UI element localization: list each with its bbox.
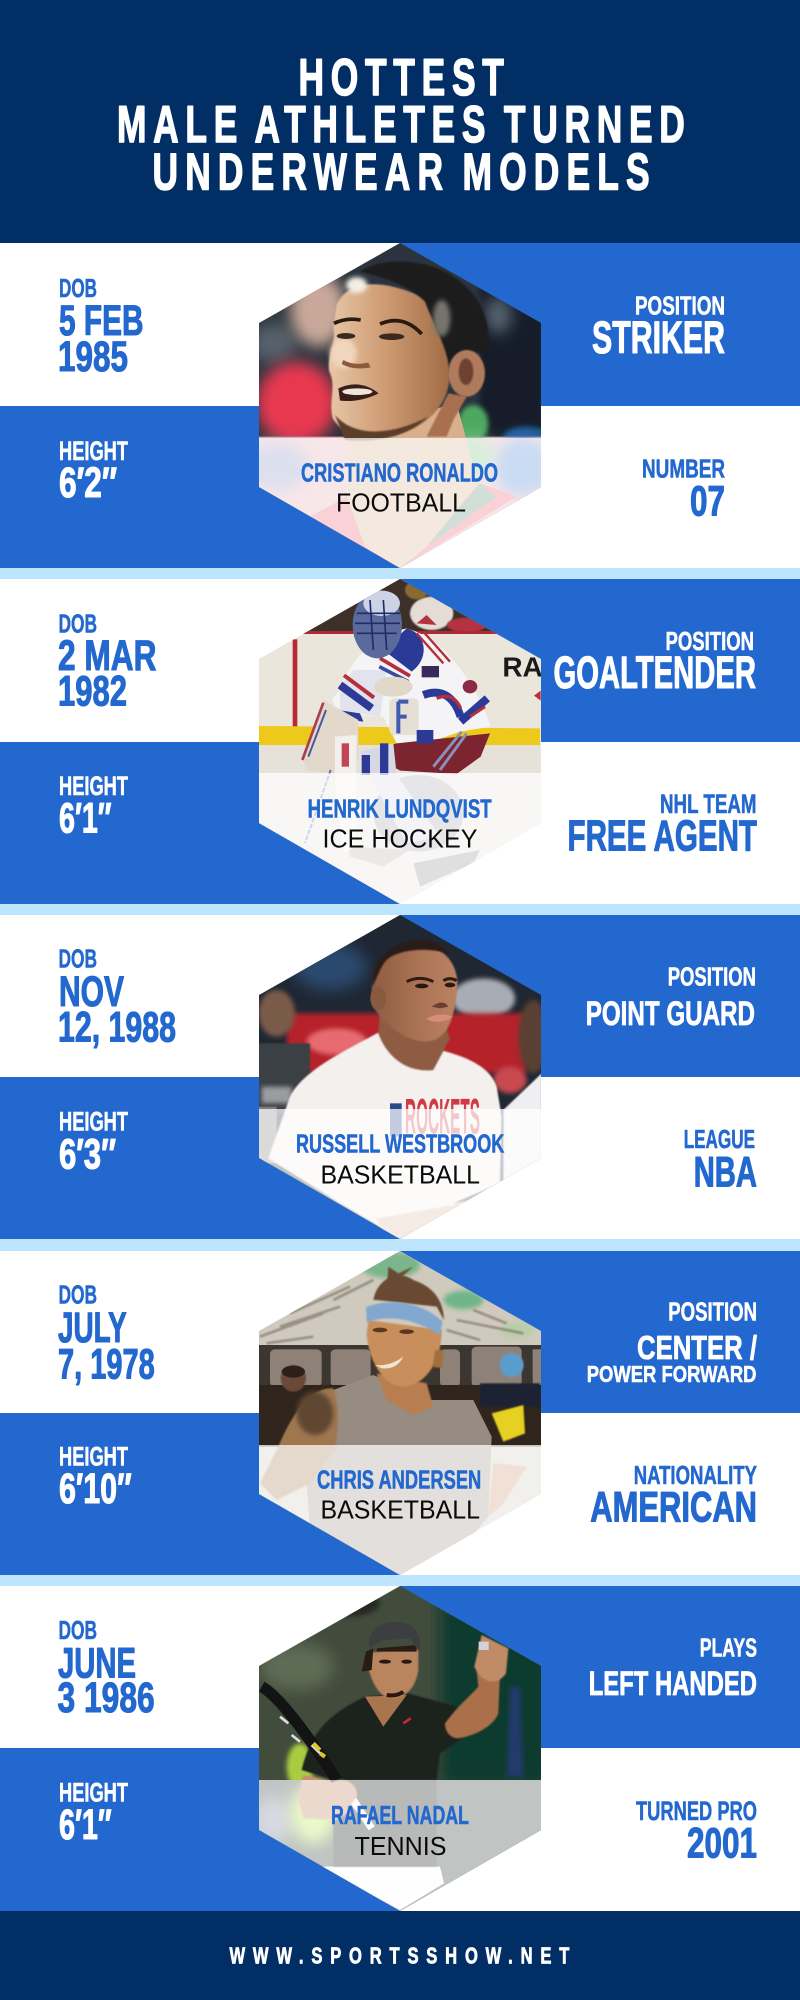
left stats: DOB	[58, 608, 97, 638]
title	[117, 49, 685, 201]
name and sport: CRISTIANO RONALDO	[301, 458, 498, 488]
left stats	[58, 608, 156, 842]
right stats: POSITION	[668, 1297, 757, 1327]
photo: Russell Westbrook: ROCKETS	[405, 1088, 480, 1144]
photo: Chris Andersen	[259, 1251, 541, 1575]
name and sport: TENNIS	[354, 1833, 446, 1861]
left stats: HEIGHT	[59, 771, 128, 801]
left stats: DOB	[59, 273, 97, 303]
left stats: 1982	[58, 668, 127, 716]
panel: Chris Andersen	[0, 1250, 800, 1583]
left stats: 1985	[58, 333, 128, 381]
name and sport: HENRIK LUNDQVIST	[308, 794, 492, 824]
right stats	[586, 962, 757, 1197]
left stats: 6′3″	[59, 1130, 116, 1178]
caption overlay	[259, 438, 541, 568]
left stats: 6′1″	[59, 794, 112, 842]
name and sport: ICE HOCKEY	[322, 825, 478, 853]
panel: Rafael Nadal	[0, 1580, 800, 1913]
right stats: NHL TEAM	[660, 789, 756, 819]
left stats: DOB	[58, 944, 97, 974]
name and sport	[308, 794, 492, 853]
left stats: 3 1986	[58, 1674, 155, 1722]
photo: Russell Westbrook	[259, 915, 541, 1239]
right stats: POWER FORWARD	[587, 1361, 756, 1387]
right stats: POSITION	[668, 962, 756, 992]
left stats: DOB	[58, 1615, 97, 1645]
panel: Russell Westbrook	[0, 910, 800, 1243]
right stats	[589, 1633, 757, 1868]
photo: Cristiano Ronaldo	[259, 243, 541, 568]
left stats: JUNE	[58, 1639, 136, 1687]
right stats: 07	[690, 478, 725, 526]
name and sport	[296, 1129, 504, 1189]
left stats: HEIGHT	[59, 1106, 128, 1136]
left stats: JULY	[58, 1304, 127, 1352]
title: MALE ATHLETES TURNED	[117, 96, 685, 154]
left stats: HEIGHT	[59, 436, 128, 466]
right stats: STRIKER	[592, 312, 725, 363]
right stats: NUMBER	[642, 454, 725, 484]
right stats: POSITION	[666, 626, 754, 656]
right stats: 2001	[687, 1820, 757, 1868]
left stats: DOB	[58, 1280, 97, 1310]
footer	[0, 1911, 800, 2000]
title: UNDERWEAR MODELS	[152, 144, 650, 201]
left stats: 5 FEB	[59, 297, 144, 345]
caption overlay	[259, 1780, 541, 1911]
left stats: 6′10″	[59, 1465, 132, 1513]
left stats: 2 MAR	[58, 632, 156, 680]
right stats: LEAGUE	[684, 1124, 755, 1154]
title: HOTTEST	[298, 49, 504, 107]
photo: Henrik Lundqvist	[259, 579, 541, 904]
left stats: NOV	[59, 968, 124, 1016]
left stats: 7, 1978	[58, 1340, 155, 1388]
right stats: NBA	[694, 1149, 757, 1197]
left stats: HEIGHT	[59, 1778, 128, 1808]
name and sport: RUSSELL WESTBROOK	[296, 1129, 504, 1159]
caption overlay	[259, 1445, 541, 1575]
name and sport: FOOTBALL	[336, 490, 466, 518]
right stats	[554, 626, 757, 860]
name and sport: BASKETBALL	[320, 1161, 480, 1189]
left stats: 6′2″	[59, 459, 117, 507]
panel: Cristiano Ronaldo	[0, 240, 800, 573]
website address: WWW.SPORTSSHOW.NET	[230, 1944, 570, 1969]
caption overlay	[259, 773, 541, 904]
right stats	[592, 290, 725, 526]
left stats: 6′1″	[59, 1801, 112, 1849]
caption overlay	[259, 1109, 541, 1239]
left stats: 12, 1988	[58, 1004, 176, 1052]
left stats	[58, 273, 144, 507]
name and sport: BASKETBALL	[320, 1497, 480, 1525]
header panel	[0, 0, 800, 243]
panel: Henrik Lundqvist	[0, 570, 800, 907]
left stats	[58, 944, 176, 1178]
name and sport	[331, 1800, 469, 1861]
left stats	[58, 1615, 155, 1849]
right stats: PLAYS	[700, 1633, 757, 1663]
left stats: HEIGHT	[59, 1442, 128, 1472]
name and sport: CHRIS ANDERSEN	[317, 1465, 481, 1495]
photo: Henrik Lundqvist: RA	[502, 652, 543, 683]
right stats: CENTER /	[637, 1329, 757, 1366]
right stats: POSITION	[635, 290, 725, 320]
right stats	[587, 1297, 757, 1532]
name and sport	[317, 1465, 481, 1525]
photo: Rafael Nadal	[259, 1586, 541, 1911]
name and sport: RAFAEL NADAL	[331, 1800, 469, 1830]
left stats	[58, 1280, 155, 1513]
name and sport	[301, 458, 498, 518]
